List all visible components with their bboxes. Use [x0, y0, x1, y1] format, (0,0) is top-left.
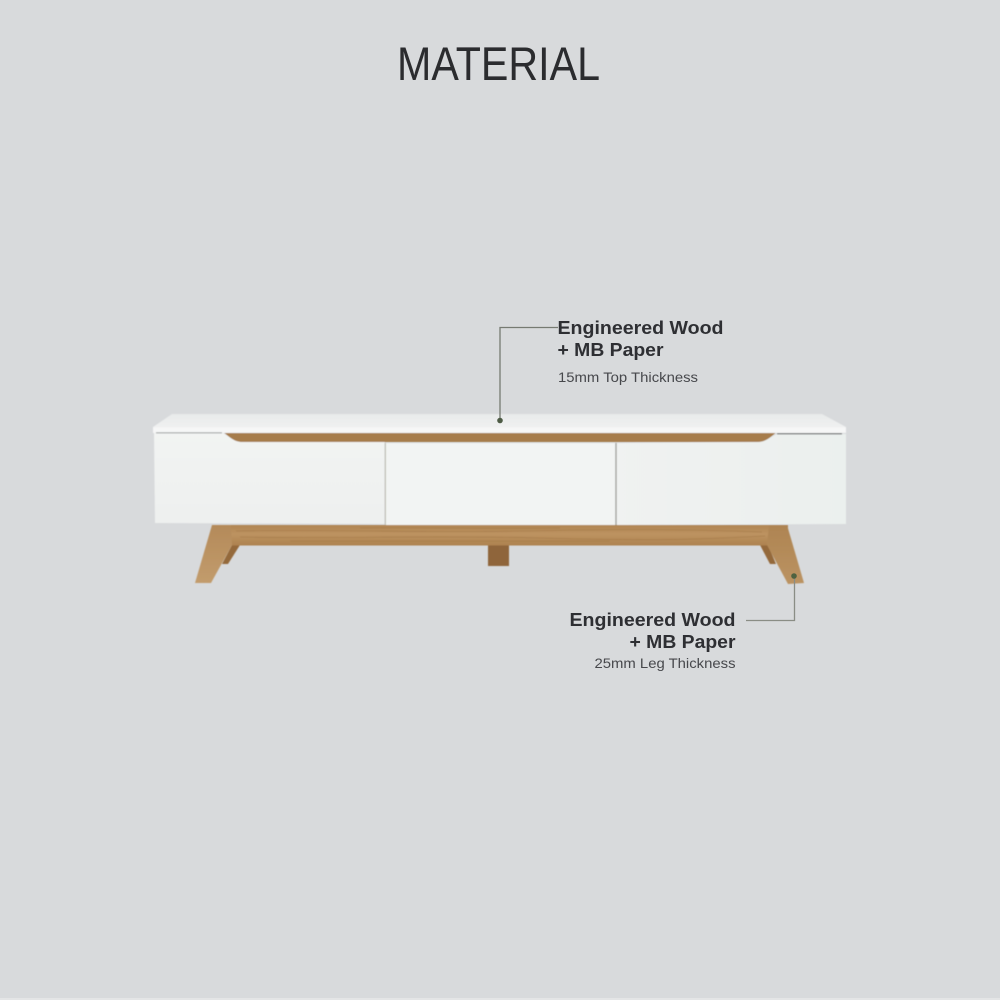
heading line two: top callout: + MB Paper — [558, 340, 664, 360]
heading line two: leg callout: + MB Paper — [630, 632, 736, 652]
leader line: top — [500, 328, 558, 420]
detail: top thickness: 15mm Top Thickness — [558, 370, 698, 385]
heading: leg callout: Engineered Wood — [570, 610, 736, 630]
title: MATERIAL — [397, 37, 600, 90]
middle drawer — [386, 443, 615, 525]
bottom edge strip — [0, 998, 1000, 1000]
wood base rail — [212, 525, 788, 546]
wood grain on rail — [236, 528, 765, 541]
heading: top callout: Engineered Wood — [558, 318, 724, 338]
callout: leg material — [570, 573, 797, 671]
front left leg — [195, 525, 232, 583]
tabletop — [153, 414, 846, 433]
detail: leg thickness: 25mm Leg Thickness — [594, 656, 736, 671]
leader line: leg — [746, 577, 794, 620]
front right leg — [767, 525, 804, 584]
wood strip under top — [223, 432, 777, 442]
drawer gaps and shadow lines — [156, 433, 842, 525]
marker dot: leg — [791, 573, 797, 579]
tv console illustration — [153, 414, 846, 584]
marker dot: top — [497, 418, 503, 423]
right drawer — [617, 434, 846, 525]
callout: top material — [497, 318, 724, 423]
back legs — [222, 545, 776, 566]
left drawer — [154, 433, 384, 524]
